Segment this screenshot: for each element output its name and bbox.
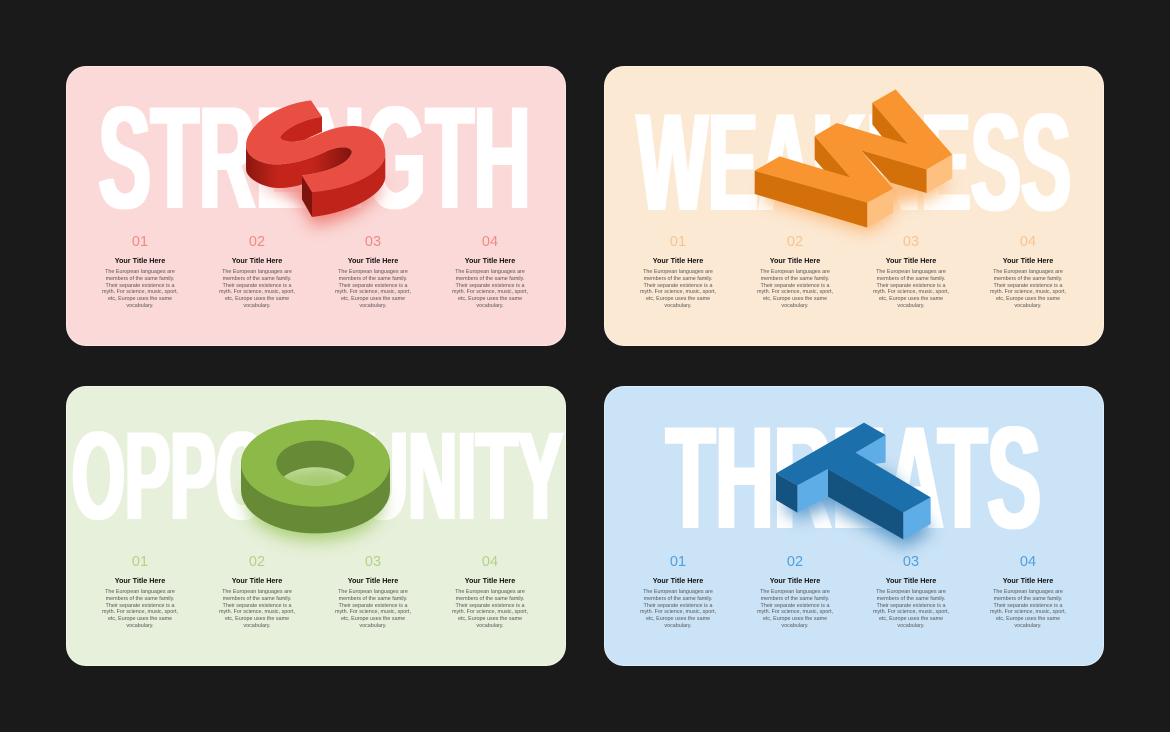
icon: 3D letter O	[241, 420, 390, 542]
column 02	[757, 234, 833, 309]
column 01: members of the same family.	[644, 276, 712, 282]
column 02: vocabulary.	[243, 303, 271, 309]
column 03: vocabulary.	[359, 303, 387, 309]
column 03: members of the same family.	[339, 276, 407, 282]
column 04: Their separate existence is a	[456, 602, 524, 608]
column 03: etc, Europe uses the same	[879, 296, 943, 302]
column 03: 03	[903, 554, 919, 570]
column 04	[990, 234, 1066, 309]
column 03: 03	[903, 234, 919, 250]
column 03: vocabulary.	[897, 623, 925, 629]
column 04: vocabulary.	[1014, 623, 1042, 629]
column 01: etc, Europe uses the same	[646, 296, 710, 302]
column 04: 04	[482, 234, 498, 250]
column 03: members of the same family.	[877, 276, 945, 282]
column 01	[102, 234, 178, 309]
column 03	[873, 234, 949, 309]
column 01	[102, 554, 178, 629]
column 04: Your Title Here	[465, 576, 515, 584]
column 01: 01	[132, 554, 148, 570]
column 01: myth. For science, music, sport,	[640, 289, 716, 295]
column 04: Their separate existence is a	[994, 602, 1062, 608]
column 04: etc, Europe uses the same	[458, 616, 522, 622]
column 02: members of the same family.	[223, 596, 291, 602]
column 01: myth. For science, music, sport,	[102, 609, 178, 615]
column 02: Your Title Here	[232, 256, 282, 264]
column 01	[640, 234, 716, 309]
panel: weakness	[604, 66, 1104, 346]
column 02: myth. For science, music, sport,	[757, 609, 833, 615]
column 03: myth. For science, music, sport,	[335, 289, 411, 295]
column 02: Your Title Here	[770, 256, 820, 264]
column 02: etc, Europe uses the same	[225, 616, 289, 622]
column 01: 01	[670, 554, 686, 570]
column 02: vocabulary.	[781, 623, 809, 629]
column 03: myth. For science, music, sport,	[873, 609, 949, 615]
column 04: members of the same family.	[994, 276, 1062, 282]
column 02: 02	[787, 554, 803, 570]
column 04: 04	[1020, 234, 1036, 250]
column 03: The European languages are	[338, 269, 408, 275]
column 01: etc, Europe uses the same	[108, 296, 172, 302]
column 04: vocabulary.	[1014, 303, 1042, 309]
column 01: vocabulary.	[664, 303, 692, 309]
column 03: etc, Europe uses the same	[341, 616, 405, 622]
column 01: Their separate existence is a	[644, 602, 712, 608]
column 03: The European languages are	[876, 269, 946, 275]
icon: 3D letter T	[776, 423, 932, 549]
panel: threats	[604, 386, 1104, 666]
column 04: members of the same family.	[456, 596, 524, 602]
panel: opportunity	[66, 386, 566, 666]
column 03	[335, 554, 411, 629]
column 01: etc, Europe uses the same	[646, 616, 710, 622]
column 01: members of the same family.	[106, 276, 174, 282]
column 01: Their separate existence is a	[644, 282, 712, 288]
column 03	[873, 554, 949, 629]
column 02: Your Title Here	[770, 576, 820, 584]
column 03: Their separate existence is a	[339, 282, 407, 288]
column 02: vocabulary.	[781, 303, 809, 309]
column 02: etc, Europe uses the same	[763, 296, 827, 302]
column 02: myth. For science, music, sport,	[757, 289, 833, 295]
column 01: vocabulary.	[664, 623, 692, 629]
column 04: Your Title Here	[465, 256, 515, 264]
column 02: Their separate existence is a	[223, 602, 291, 608]
column 03	[335, 234, 411, 309]
column 02: Their separate existence is a	[761, 282, 829, 288]
column 02: members of the same family.	[761, 596, 829, 602]
column 04	[990, 554, 1066, 629]
column 04: myth. For science, music, sport,	[990, 289, 1066, 295]
column 03: Your Title Here	[886, 576, 936, 584]
panel: strength	[66, 66, 566, 346]
column 01: The European languages are	[643, 589, 713, 595]
column 01: myth. For science, music, sport,	[102, 289, 178, 295]
column 04: members of the same family.	[994, 596, 1062, 602]
column 04: Their separate existence is a	[456, 282, 524, 288]
column 03: members of the same family.	[339, 596, 407, 602]
column 02: The European languages are	[760, 269, 830, 275]
column 02: The European languages are	[222, 269, 292, 275]
column 04: etc, Europe uses the same	[996, 616, 1060, 622]
column 02	[757, 554, 833, 629]
column 03: myth. For science, music, sport,	[873, 289, 949, 295]
column 04: Your Title Here	[1003, 576, 1053, 584]
column 02: vocabulary.	[243, 623, 271, 629]
column 01: members of the same family.	[106, 596, 174, 602]
column 03: vocabulary.	[897, 303, 925, 309]
column 02: myth. For science, music, sport,	[219, 289, 295, 295]
column 04: 04	[482, 554, 498, 570]
column 01: vocabulary.	[126, 303, 154, 309]
column 01: Your Title Here	[115, 576, 165, 584]
column 04: myth. For science, music, sport,	[990, 609, 1066, 615]
column 02: myth. For science, music, sport,	[219, 609, 295, 615]
column 03: 03	[365, 554, 381, 570]
column 01: Their separate existence is a	[106, 602, 174, 608]
column 02	[219, 234, 295, 309]
column 04: vocabulary.	[476, 623, 504, 629]
column 04: Their separate existence is a	[994, 282, 1062, 288]
column 02	[219, 554, 295, 629]
column 04	[452, 234, 528, 309]
column 04: myth. For science, music, sport,	[452, 289, 528, 295]
column 02: Your Title Here	[232, 576, 282, 584]
column 04: etc, Europe uses the same	[458, 296, 522, 302]
column 04: The European languages are	[455, 269, 525, 275]
column 02: etc, Europe uses the same	[763, 616, 827, 622]
column 04: The European languages are	[993, 589, 1063, 595]
column 02: members of the same family.	[761, 276, 829, 282]
column 04: 04	[1020, 554, 1036, 570]
column 01: The European languages are	[105, 269, 175, 275]
column 01: The European languages are	[105, 589, 175, 595]
column 01: members of the same family.	[644, 596, 712, 602]
column 03: Their separate existence is a	[877, 602, 945, 608]
column 04: The European languages are	[993, 269, 1063, 275]
column 04: members of the same family.	[456, 276, 524, 282]
column 01: Their separate existence is a	[106, 282, 174, 288]
column 01: The European languages are	[643, 269, 713, 275]
column 01: Your Title Here	[115, 256, 165, 264]
column 02: 02	[249, 554, 265, 570]
column 01: myth. For science, music, sport,	[640, 609, 716, 615]
column 03: etc, Europe uses the same	[879, 616, 943, 622]
icon: 3D letter W	[755, 89, 952, 234]
column 01	[640, 554, 716, 629]
column 03: The European languages are	[876, 589, 946, 595]
column 02: The European languages are	[222, 589, 292, 595]
column 02: 02	[249, 234, 265, 250]
column 02: 02	[787, 234, 803, 250]
column 03: Your Title Here	[348, 256, 398, 264]
column 03: Their separate existence is a	[339, 602, 407, 608]
column 01: vocabulary.	[126, 623, 154, 629]
icon: 3D letter S	[246, 100, 385, 227]
column 02: Their separate existence is a	[223, 282, 291, 288]
column 03: etc, Europe uses the same	[341, 296, 405, 302]
column 01: 01	[132, 234, 148, 250]
column 03: Their separate existence is a	[877, 282, 945, 288]
column 04: Your Title Here	[1003, 256, 1053, 264]
column 04: etc, Europe uses the same	[996, 296, 1060, 302]
column 02: members of the same family.	[223, 276, 291, 282]
column 03: Your Title Here	[886, 256, 936, 264]
column 04: The European languages are	[455, 589, 525, 595]
column 03: Your Title Here	[348, 576, 398, 584]
column 01: etc, Europe uses the same	[108, 616, 172, 622]
column 03: myth. For science, music, sport,	[335, 609, 411, 615]
column 02: Their separate existence is a	[761, 602, 829, 608]
column 01: Your Title Here	[653, 256, 703, 264]
column 04: vocabulary.	[476, 303, 504, 309]
column 04: myth. For science, music, sport,	[452, 609, 528, 615]
column 01: Your Title Here	[653, 576, 703, 584]
column 03: vocabulary.	[359, 623, 387, 629]
column 02: The European languages are	[760, 589, 830, 595]
column 03: The European languages are	[338, 589, 408, 595]
column 04	[452, 554, 528, 629]
column 03: members of the same family.	[877, 596, 945, 602]
column 02: etc, Europe uses the same	[225, 296, 289, 302]
column 01: 01	[670, 234, 686, 250]
column 03: 03	[365, 234, 381, 250]
